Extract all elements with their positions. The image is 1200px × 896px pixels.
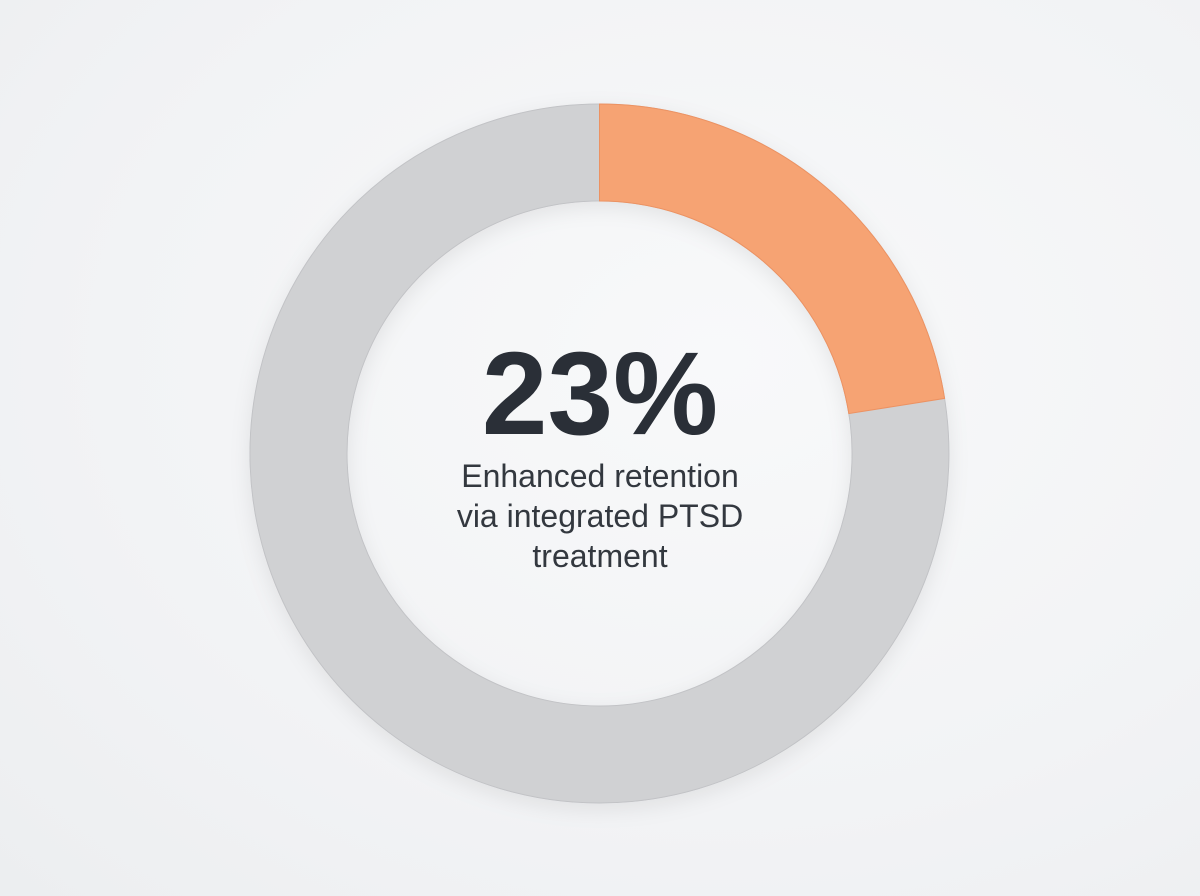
donut segment: 23% orange bbox=[600, 104, 945, 414]
caption: treatment bbox=[532, 538, 668, 574]
big number: 23% bbox=[482, 328, 718, 460]
center label bbox=[457, 328, 743, 574]
donut ring: remaining share bbox=[250, 104, 949, 803]
caption: via integrated PTSD bbox=[457, 498, 743, 534]
caption bbox=[457, 458, 743, 574]
caption: Enhanced retention bbox=[461, 458, 739, 494]
